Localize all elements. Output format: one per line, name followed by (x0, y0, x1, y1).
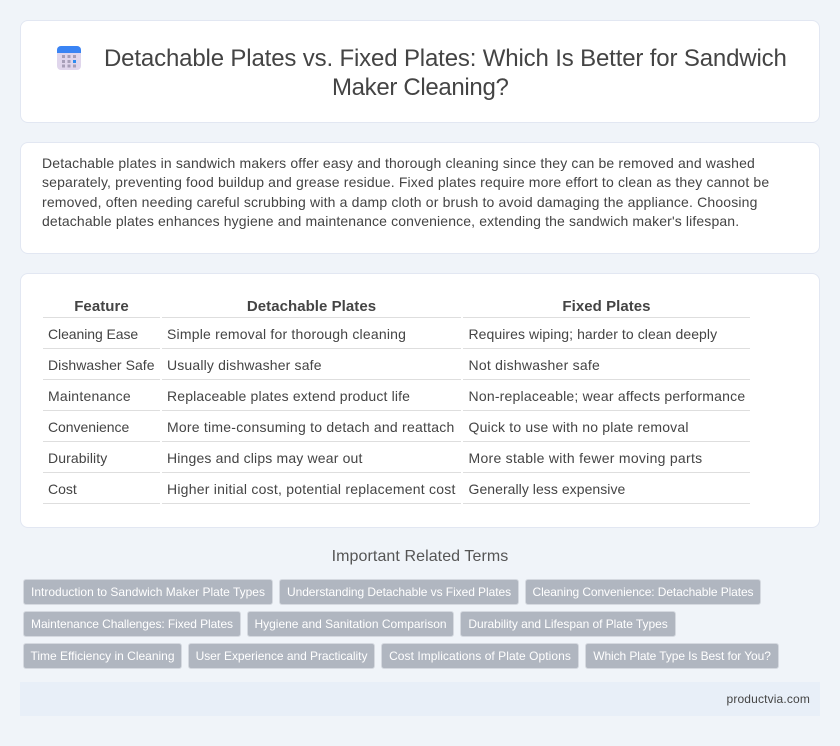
row: cleaning ease: Simple removal for thorough cleaning (167, 326, 406, 342)
row: cost: Generally less expensive (468, 481, 625, 497)
text: separately, preventing food buildup and grease residue. Fixed plates require more effort to clean as they cannot be (42, 174, 769, 190)
comparison table (43, 298, 750, 504)
row: cost: Higher initial cost, potential replacement cost (167, 481, 456, 497)
summary text (42, 155, 769, 229)
row: maintenance: Replaceable plates extend product life (167, 388, 410, 404)
row: dishwasher safe: Dishwasher Safe (48, 357, 155, 373)
text: Detachable plates in sandwich makers offer easy and thorough cleaning since they can be removed and washed (42, 155, 755, 171)
row: maintenance: Maintenance (48, 388, 131, 404)
table header: Detachable Plates (247, 298, 376, 315)
table header (74, 298, 651, 315)
text: detachable plates enhances hygiene and maintenance convenience, extending the sandwich maker's lifespan. (42, 213, 739, 229)
table header: Feature (74, 298, 129, 315)
tags: related terms: Cleaning Convenience: Detachable Plates (533, 585, 753, 599)
tags: related terms: Maintenance Challenges: Fixed Plates (31, 617, 233, 631)
row: convenience: Convenience (48, 419, 129, 435)
tags: related terms: Time Efficiency in Cleaning (30, 649, 175, 663)
title: Detachable Plates vs. Fixed Plates: Which Is Better for Sandwich (104, 45, 787, 72)
row: dishwasher safe: Not dishwasher safe (468, 357, 600, 373)
row: cleaning ease (48, 326, 718, 342)
panel: summary card (20, 142, 820, 254)
row: maintenance: Non-replaceable; wear affects performance (468, 388, 745, 404)
title: Maker Cleaning? (332, 74, 508, 101)
row: cost: Cost (48, 481, 77, 497)
tags: related terms: Understanding Detachable vs Fixed Plates (287, 585, 511, 599)
tags: related terms: Durability and Lifespan of Plate Types (468, 617, 668, 631)
row: convenience (48, 419, 689, 435)
text: removed, often needing careful scrubbing with a damp cloth or brush to avoid damaging the appliance. Choosing (42, 194, 758, 210)
tags: related terms: User Experience and Practicality (196, 649, 367, 663)
tags: related terms: Introduction to Sandwich Maker Plate Types (31, 585, 265, 599)
panel: comparison table card (20, 273, 820, 528)
row: dishwasher safe (48, 357, 600, 373)
footer source text: productvia.com (727, 692, 810, 706)
table header: Fixed Plates (562, 298, 651, 315)
icon: calendar (57, 46, 81, 70)
row: durability (48, 450, 702, 466)
panel: title card (20, 20, 820, 123)
row: durability: Hinges and clips may wear out (167, 450, 363, 466)
title (104, 45, 787, 101)
heading: important related terms: Important Related Terms (332, 548, 508, 565)
row: convenience: More time-consuming to detach and reattach (167, 419, 454, 435)
tags: related terms: Which Plate Type Is Best for You? (593, 649, 771, 663)
row: cleaning ease: Requires wiping; harder to clean deeply (468, 326, 717, 342)
row: convenience: Quick to use with no plate removal (468, 419, 689, 435)
row: dishwasher safe: Usually dishwasher safe (167, 357, 322, 373)
row: durability: Durability (48, 450, 107, 466)
tags: related terms (23, 579, 779, 669)
row: durability: More stable with fewer moving parts (468, 450, 702, 466)
row: cost (48, 481, 625, 497)
row: cleaning ease: Cleaning Ease (48, 326, 138, 342)
tags: related terms: Cost Implications of Plate Options (389, 649, 571, 663)
tags: related terms: Hygiene and Sanitation Comparison (254, 617, 447, 631)
row: maintenance (48, 388, 745, 404)
footer bar (20, 682, 820, 716)
